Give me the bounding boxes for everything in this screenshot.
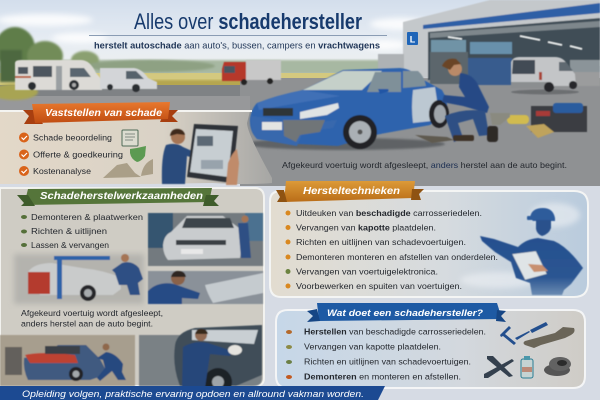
note text: anders herstel aan de auto begint.	[21, 318, 153, 328]
technique list: Vervangen van kapotte plaatdelen.	[296, 222, 436, 232]
ground shadow under car	[245, 138, 445, 150]
icon: L sign	[407, 32, 418, 45]
tablet	[187, 124, 238, 183]
heading ribbon: Wat doet een schadehersteller?	[327, 308, 483, 319]
task list	[21, 212, 143, 250]
note text	[21, 308, 163, 328]
photo: car on straightening bench	[14, 254, 144, 304]
photo: welder at bonnet	[148, 271, 263, 304]
panel: Schadeherstelwerkzaamheden	[0, 188, 264, 396]
photo: silver car front	[148, 213, 263, 266]
icon: crossed tools	[484, 356, 514, 378]
footer banner	[0, 386, 385, 400]
mechanic with car	[442, 59, 498, 142]
title: Alles over schadehersteller	[134, 9, 362, 34]
icon: green shield	[130, 146, 146, 162]
icon: bottle	[521, 356, 533, 378]
damaged blue car	[250, 68, 449, 149]
technique list	[286, 208, 498, 291]
note text: Afgekeurd voertuig wordt afgesleept,	[21, 308, 163, 318]
heading ribbon: Hersteltechnieken	[303, 186, 400, 197]
checklist	[19, 132, 123, 176]
task list: Lassen & vervangen	[31, 240, 109, 250]
icon: inspector silhouette with clipboard	[480, 208, 583, 295]
title	[89, 9, 387, 50]
heading ribbon	[23, 102, 178, 124]
checklist: Schade beoordeling	[33, 132, 112, 142]
heading ribbon	[307, 303, 506, 322]
heading ribbon	[276, 181, 424, 202]
panel: Wat doet een schadehersteller?	[276, 303, 585, 388]
task list: Demonteren & plaatwerken	[31, 212, 143, 222]
role list: Richten en uitlijnen van schadevoertuigen.	[304, 356, 471, 366]
heading ribbon: Schadeherstelwerkzaamheden	[40, 191, 203, 202]
icon: wrench	[524, 327, 575, 348]
role list: Demonteren en monteren en afstellen.	[304, 372, 461, 382]
technique list: Uitdeuken van beschadigde carrosseriedelen.	[296, 208, 482, 218]
technique list: Richten en uitlijnen van schadevoertuigen.	[296, 237, 466, 247]
role list: Vervangen van kapotte plaatdelen.	[304, 342, 441, 352]
icon: stacked tyres	[544, 357, 571, 376]
heading ribbon	[17, 188, 219, 206]
red truck	[222, 60, 281, 85]
panel: Hersteltechnieken	[270, 181, 588, 297]
mechanic with tablet	[162, 124, 239, 185]
technique list: Demonteren monteren en afstellen van onderdelen.	[296, 252, 498, 262]
trees and hedge	[0, 27, 215, 100]
photo: mechanic polishing dark car	[139, 325, 262, 396]
technique list: Voorbewerken en spuiten van voertuigen.	[296, 281, 462, 291]
title: herstelt autoschade aan auto's, bussen, campers en vrachtwagens	[94, 40, 380, 50]
role list: Herstellen van beschadigde carrosseriedelen.	[304, 326, 486, 336]
technique list: Vervangen van voertuigelektronica.	[296, 266, 438, 276]
checklist: Kostenanalyse	[33, 166, 91, 176]
parked silver van	[511, 57, 579, 94]
task list: Richten & uitlijnen	[31, 226, 107, 236]
icon: hammer and screwdriver	[500, 322, 548, 345]
white van	[100, 68, 157, 92]
icon: bag of tools	[103, 159, 153, 178]
tools and case	[415, 103, 587, 143]
role list	[286, 326, 486, 382]
caption under car: Afgekeurd voertuig wordt afgesleept, anders herstel aan de auto begint.	[282, 160, 567, 170]
icon: clipboard	[122, 130, 138, 146]
garage building	[378, 0, 600, 86]
camper	[15, 60, 102, 90]
panel: Vaststellen van schade	[0, 102, 272, 185]
footer banner: Opleiding volgen, praktische ervaring opdoen en allround vakman worden.	[22, 389, 364, 400]
icon: L sign: L	[410, 34, 416, 44]
checklist: Offerte & goedkeuring	[33, 150, 123, 160]
heading ribbon: Vaststellen van schade	[45, 107, 162, 119]
photo: red and blue car in workshop	[0, 335, 135, 386]
